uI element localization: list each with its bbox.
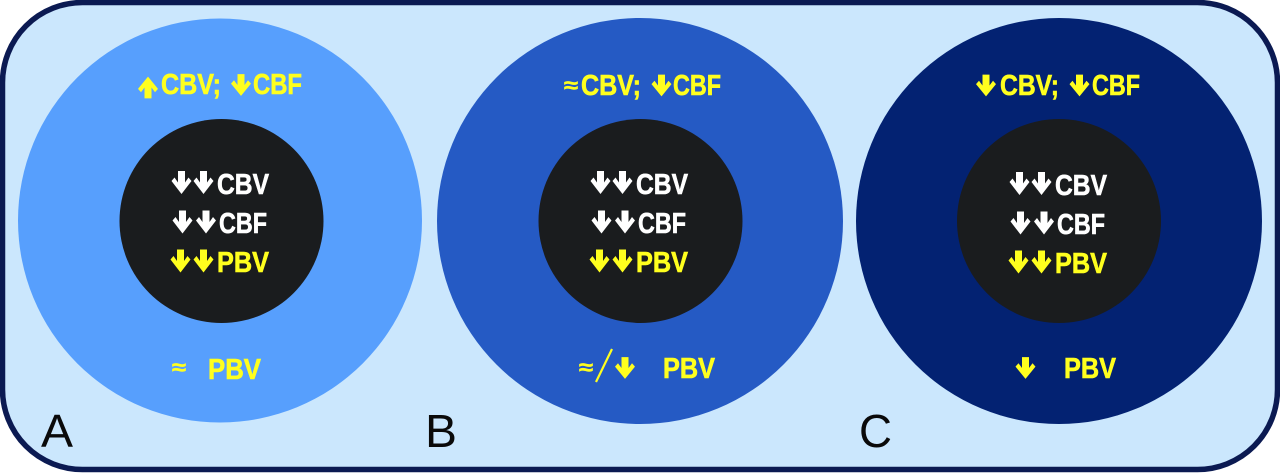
heading: A outer values [138, 69, 302, 101]
inner values A: CBV [217, 169, 270, 201]
label: A: A [41, 405, 73, 457]
inner values B [590, 169, 689, 279]
bottom value B: PBV [663, 353, 716, 385]
heading: A outer values: CBF [253, 69, 302, 101]
inner values A: PBV [217, 247, 270, 279]
heading: C outer values: CBF [1092, 70, 1140, 102]
inner values C: PBV [1055, 248, 1108, 280]
heading: B outer values: CBV; [581, 70, 641, 102]
heading: B outer values: ≈ [564, 75, 578, 97]
inner values B: CBF [638, 208, 686, 240]
heading: C outer values [976, 70, 1140, 102]
outer circle B [437, 18, 843, 424]
panel: A [18, 18, 422, 422]
inner values A: CBF [219, 208, 267, 240]
bottom value A: ≈ [172, 357, 186, 379]
inner circle C [957, 119, 1161, 323]
heading: B outer values: CBF [673, 70, 721, 102]
bottom value A: PBV [208, 354, 262, 386]
bottom value B: ≈ [579, 357, 593, 379]
inner circle B [538, 119, 742, 323]
inner values A [170, 169, 270, 279]
outer circle A [18, 18, 422, 422]
heading: A outer values: CBV; [161, 69, 221, 101]
outer circle C [856, 18, 1262, 424]
bottom value B [579, 349, 716, 385]
inner values C [1008, 170, 1108, 280]
inner values C: CBF [1057, 209, 1105, 241]
inner values B: PBV [636, 247, 689, 279]
inner values C: CBV [1055, 170, 1108, 202]
inner values B: CBV [636, 169, 689, 201]
heading: C outer values: CBV; [1000, 70, 1059, 102]
heading: B outer values [564, 70, 721, 102]
panel: C [856, 18, 1262, 424]
label: B: B [425, 405, 457, 457]
inner circle A [120, 119, 324, 323]
bottom value A [172, 354, 262, 386]
panel: B [437, 18, 843, 424]
bottom value C: PBV [1064, 353, 1117, 385]
label: C: C [859, 405, 892, 457]
bottom value C [1016, 353, 1117, 385]
